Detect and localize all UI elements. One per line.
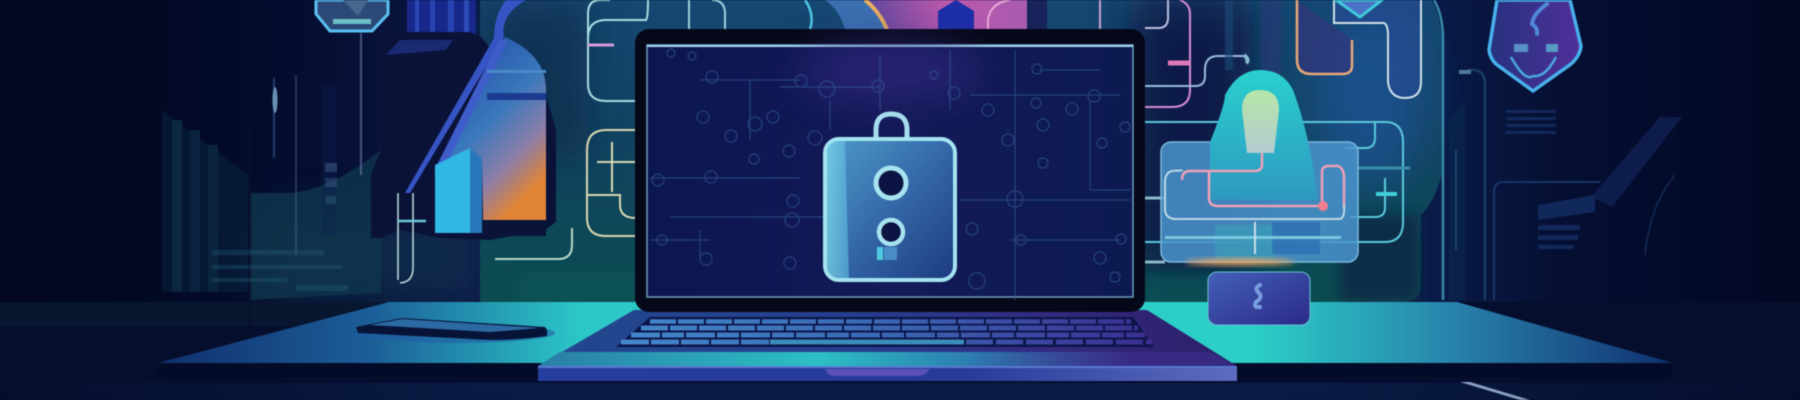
laptop lid [635,29,1145,312]
table top [158,302,1673,363]
neon panel lower left [587,130,636,236]
table front edge [158,363,1673,400]
background wall [0,0,1800,302]
dark tower block [371,32,556,240]
right background machinery [1449,70,1682,300]
phone on table [355,318,555,343]
central teal wall panel [480,0,1443,302]
background hill shape [250,150,381,300]
hologram card [1161,142,1358,262]
small box with squiggle [1208,272,1310,325]
right cyan circuit frame [1145,122,1410,262]
background tall vertical lines [248,33,362,327]
neon panel upper left [588,0,812,101]
keyboard [616,317,1154,347]
icon: shield top right [1489,0,1581,91]
lamp bell [1210,70,1318,200]
background faint stairs [212,250,348,291]
neon white U path [1334,0,1421,98]
lamp bulb [1242,90,1279,153]
icon: hexagon badge top left [316,0,388,31]
laptop trackpad notch [825,369,930,376]
laptop screen [647,40,1133,297]
screen circuit pattern [650,49,1130,300]
diagonal blue blade [405,0,526,193]
blue vertical bars at top [407,0,476,34]
cyan block [435,148,546,236]
icon: blue pentagon at top [938,0,974,30]
orange glow under card [1185,259,1295,265]
pink circuit on hologram card [1165,153,1344,219]
window with orange gradient [435,37,546,220]
icon: small diamond badge top [1336,0,1382,17]
neon teal arc edge [1434,0,1443,300]
neon H-shape left [398,193,426,283]
neon J line [495,228,572,259]
neon orange rounded frame [1225,0,1352,80]
padlock icon [825,114,955,280]
background left stripes [162,110,248,292]
floor [0,302,1800,400]
neon pink circuit right of laptop [1100,0,1248,107]
laptop base [538,310,1237,381]
pink glowing panel at top [825,0,1047,32]
